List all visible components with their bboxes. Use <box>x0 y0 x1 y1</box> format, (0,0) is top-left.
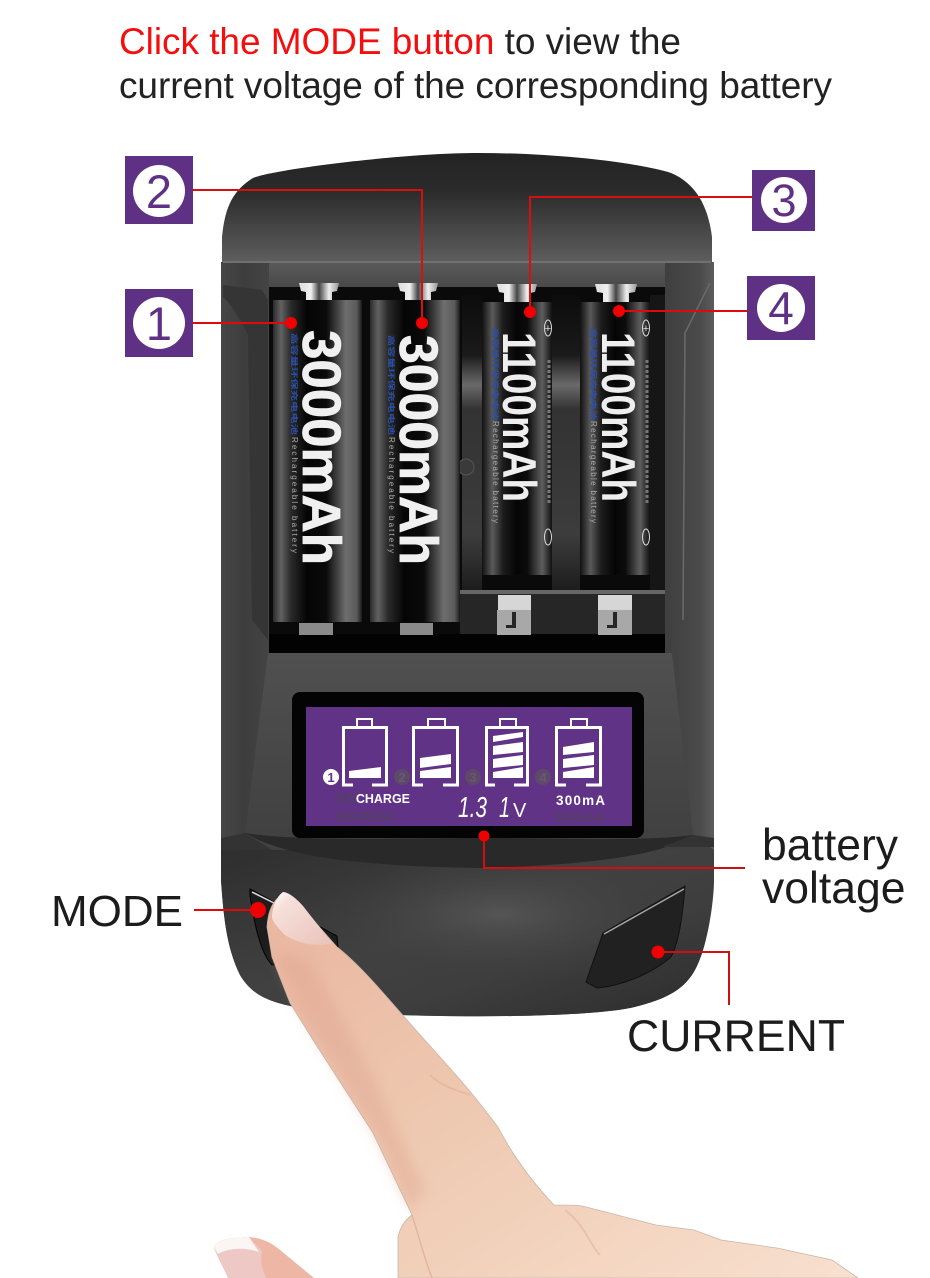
LCD current labels: 500mA <box>556 810 605 825</box>
callout 1 <box>125 289 297 357</box>
callout 4 <box>613 276 815 340</box>
LCD battery gauge 3 <box>486 719 528 785</box>
battery 4: 1100mAh: Rechargeable battery <box>589 421 598 523</box>
battery 2: 3000mAh <box>370 283 460 635</box>
battery 1: 3000mAh <box>273 283 362 635</box>
callout 4: 4 <box>768 282 794 334</box>
LCD frame <box>292 692 644 838</box>
charger left side <box>221 262 269 850</box>
title: Click the MODE button to view the <box>119 21 681 62</box>
callout: battery voltage: battery <box>762 821 899 870</box>
battery 4: 1100mAh <box>580 284 650 635</box>
MODE button <box>250 889 338 965</box>
battery 1: 3000mAh: 3000mAh <box>291 330 351 565</box>
second fingernail at bottom <box>214 1237 314 1278</box>
battery 2: 3000mAh: 3000mAh <box>388 335 448 565</box>
callout: CURRENT: CURRENT <box>627 1012 845 1061</box>
LCD slot numbers <box>323 769 551 785</box>
finger shadow <box>272 950 425 1210</box>
battery 1: 3000mAh: Rechargeable battery <box>290 437 299 553</box>
charger right side <box>665 262 714 850</box>
battery 2: 3000mAh: 高容量环保充电电池 <box>387 335 396 435</box>
callout 2: 2 <box>146 165 172 218</box>
battery 4: 1100mAh: 1100mAh <box>592 332 645 502</box>
title: current voltage of the corresponding battery <box>119 65 832 106</box>
callout 1: 1 <box>146 297 172 350</box>
callout: MODE <box>51 887 266 936</box>
LCD slot numbers: 2 <box>398 770 406 785</box>
LCD slot numbers: 4 <box>539 770 547 785</box>
callout: battery voltage: voltage <box>762 864 906 913</box>
LCD battery gauge 1 <box>344 719 386 785</box>
battery 3: 1100mAh: 高容量环保充电电池 <box>491 328 500 420</box>
LCD current labels <box>556 793 605 825</box>
battery 3: 1100mAh: 1100mAh <box>493 332 546 502</box>
LCD slot numbers: 3 <box>469 770 477 785</box>
lower body shell <box>221 850 714 1016</box>
charger lid dome <box>222 153 712 262</box>
LCD battery gauge 4 <box>556 719 600 785</box>
LCD voltage readout: 1 <box>499 792 510 824</box>
callout: MODE: MODE <box>51 887 183 936</box>
battery 3: 1100mAh: + <box>545 323 551 335</box>
callout: battery voltage <box>478 821 906 913</box>
CURRENT button <box>586 886 685 988</box>
index fingernail <box>272 892 332 945</box>
knuckle creases <box>430 1075 600 1255</box>
LCD battery gauge 2 <box>414 719 458 785</box>
LCD slot numbers: 1 <box>327 770 335 785</box>
title <box>119 21 832 106</box>
battery 2: 3000mAh: Rechargeable battery <box>387 437 396 553</box>
LCD voltage readout: V <box>513 800 527 822</box>
callout 2 <box>125 156 428 329</box>
LCD voltage readout: 1.3 <box>458 792 487 824</box>
LCD screen <box>306 707 632 826</box>
battery 1: 3000mAh: 高容量环保充电电池 <box>290 333 299 435</box>
battery compartment <box>269 287 665 654</box>
callout 3 <box>524 170 815 318</box>
charger silhouette base <box>221 262 714 1016</box>
LCD mode labels <box>335 792 410 824</box>
battery 4: 1100mAh: + <box>643 323 649 335</box>
callout 3: 3 <box>771 175 797 226</box>
battery 3: 1100mAh: Rechargeable battery <box>491 421 500 523</box>
LCD mode labels: DISCHARGE <box>335 792 410 806</box>
LCD mode labels: REFRESH <box>335 810 395 824</box>
display housing <box>245 653 693 868</box>
LCD current labels: 300mA <box>556 793 605 808</box>
battery 3: 1100mAh <box>482 284 552 635</box>
compartment upper wall <box>269 262 665 290</box>
pointing finger and hand <box>214 892 858 1278</box>
battery 4: 1100mAh: 高容量环保充电电池 <box>589 328 598 420</box>
charger body <box>221 153 714 1016</box>
callout: CURRENT <box>627 946 845 1061</box>
dark band below display <box>245 833 693 868</box>
LCD voltage readout <box>458 792 527 824</box>
